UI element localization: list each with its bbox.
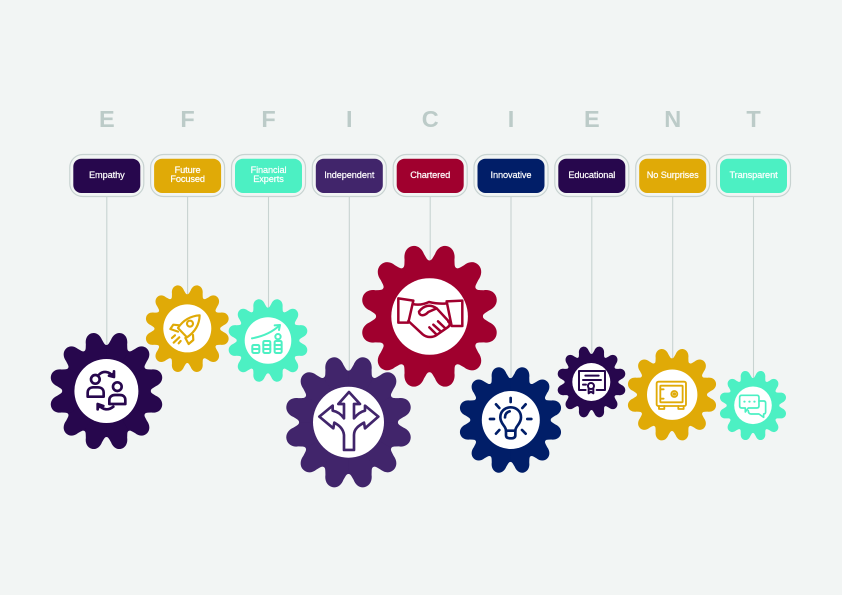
label: Empathy — [70, 154, 144, 196]
letter I: I — [346, 106, 353, 132]
gear: Financial Experts — [227, 297, 309, 384]
label: Financial Experts: Financial — [251, 165, 286, 175]
letter F: F — [261, 106, 276, 132]
icon: certificate — [579, 371, 605, 393]
column: No Surprises — [626, 106, 718, 443]
connector line — [591, 197, 593, 360]
gear: Empathy — [48, 330, 165, 452]
label: Innovative: Innovative — [491, 170, 531, 180]
label: Future Focused: Future — [175, 165, 201, 175]
icon: rocket — [170, 315, 200, 344]
connector line — [106, 197, 108, 350]
icon: three-way arrows — [319, 392, 378, 450]
column: Innovative — [457, 106, 564, 475]
letter E: E — [99, 106, 115, 132]
label: Transparent: Transparent — [729, 170, 778, 180]
column: Empathy — [48, 106, 165, 452]
connector line — [672, 197, 674, 365]
label: Independent — [312, 154, 386, 196]
label: Transparent — [716, 154, 790, 196]
label: Financial Experts: Experts — [253, 174, 284, 184]
gear: No Surprises — [626, 347, 718, 443]
letter T: T — [746, 106, 761, 132]
column: Independent — [283, 106, 414, 490]
icon: safe — [657, 382, 686, 409]
connector line — [187, 197, 189, 300]
label: Innovative — [474, 154, 548, 196]
connector line — [752, 197, 754, 385]
icon: growth chart and coins — [252, 325, 282, 353]
label: Future Focused — [151, 154, 225, 196]
connector line — [429, 197, 431, 265]
label: Educational — [555, 154, 629, 196]
column: Transparent — [716, 106, 790, 442]
icon: handshake — [398, 298, 462, 337]
label: Financial Experts — [232, 154, 306, 196]
letter E: E — [584, 106, 600, 132]
connector line — [510, 197, 512, 385]
connector line — [348, 197, 350, 375]
letter C: C — [422, 106, 439, 132]
label: No Surprises — [636, 154, 710, 196]
label: Chartered: Chartered — [410, 170, 450, 180]
gear: Future Focused — [144, 283, 231, 374]
letter F: F — [180, 106, 195, 132]
column: Educational — [555, 106, 629, 419]
label: Independent: Independent — [324, 170, 375, 180]
label: Future Focused: Focused — [170, 174, 205, 184]
letter I: I — [508, 106, 514, 132]
gear: Independent — [283, 354, 414, 490]
label: Empathy: Empathy — [89, 170, 125, 180]
column: Financial Experts — [227, 106, 309, 384]
label: Educational: Educational — [568, 170, 615, 180]
connector line — [268, 197, 270, 310]
icon: chat bubbles — [740, 395, 766, 417]
column: Chartered — [359, 106, 500, 390]
column: Future Focused — [144, 106, 231, 374]
gear: Chartered — [359, 243, 500, 390]
letter N: N — [664, 106, 681, 132]
icon: people exchange — [88, 371, 125, 409]
label: No Surprises: No Surprises — [647, 170, 699, 180]
gear: Innovative — [457, 365, 564, 475]
gear: Transparent — [718, 369, 788, 442]
icon: light bulb — [490, 398, 531, 438]
gear: Educational — [556, 345, 627, 419]
label: Chartered — [393, 154, 467, 196]
